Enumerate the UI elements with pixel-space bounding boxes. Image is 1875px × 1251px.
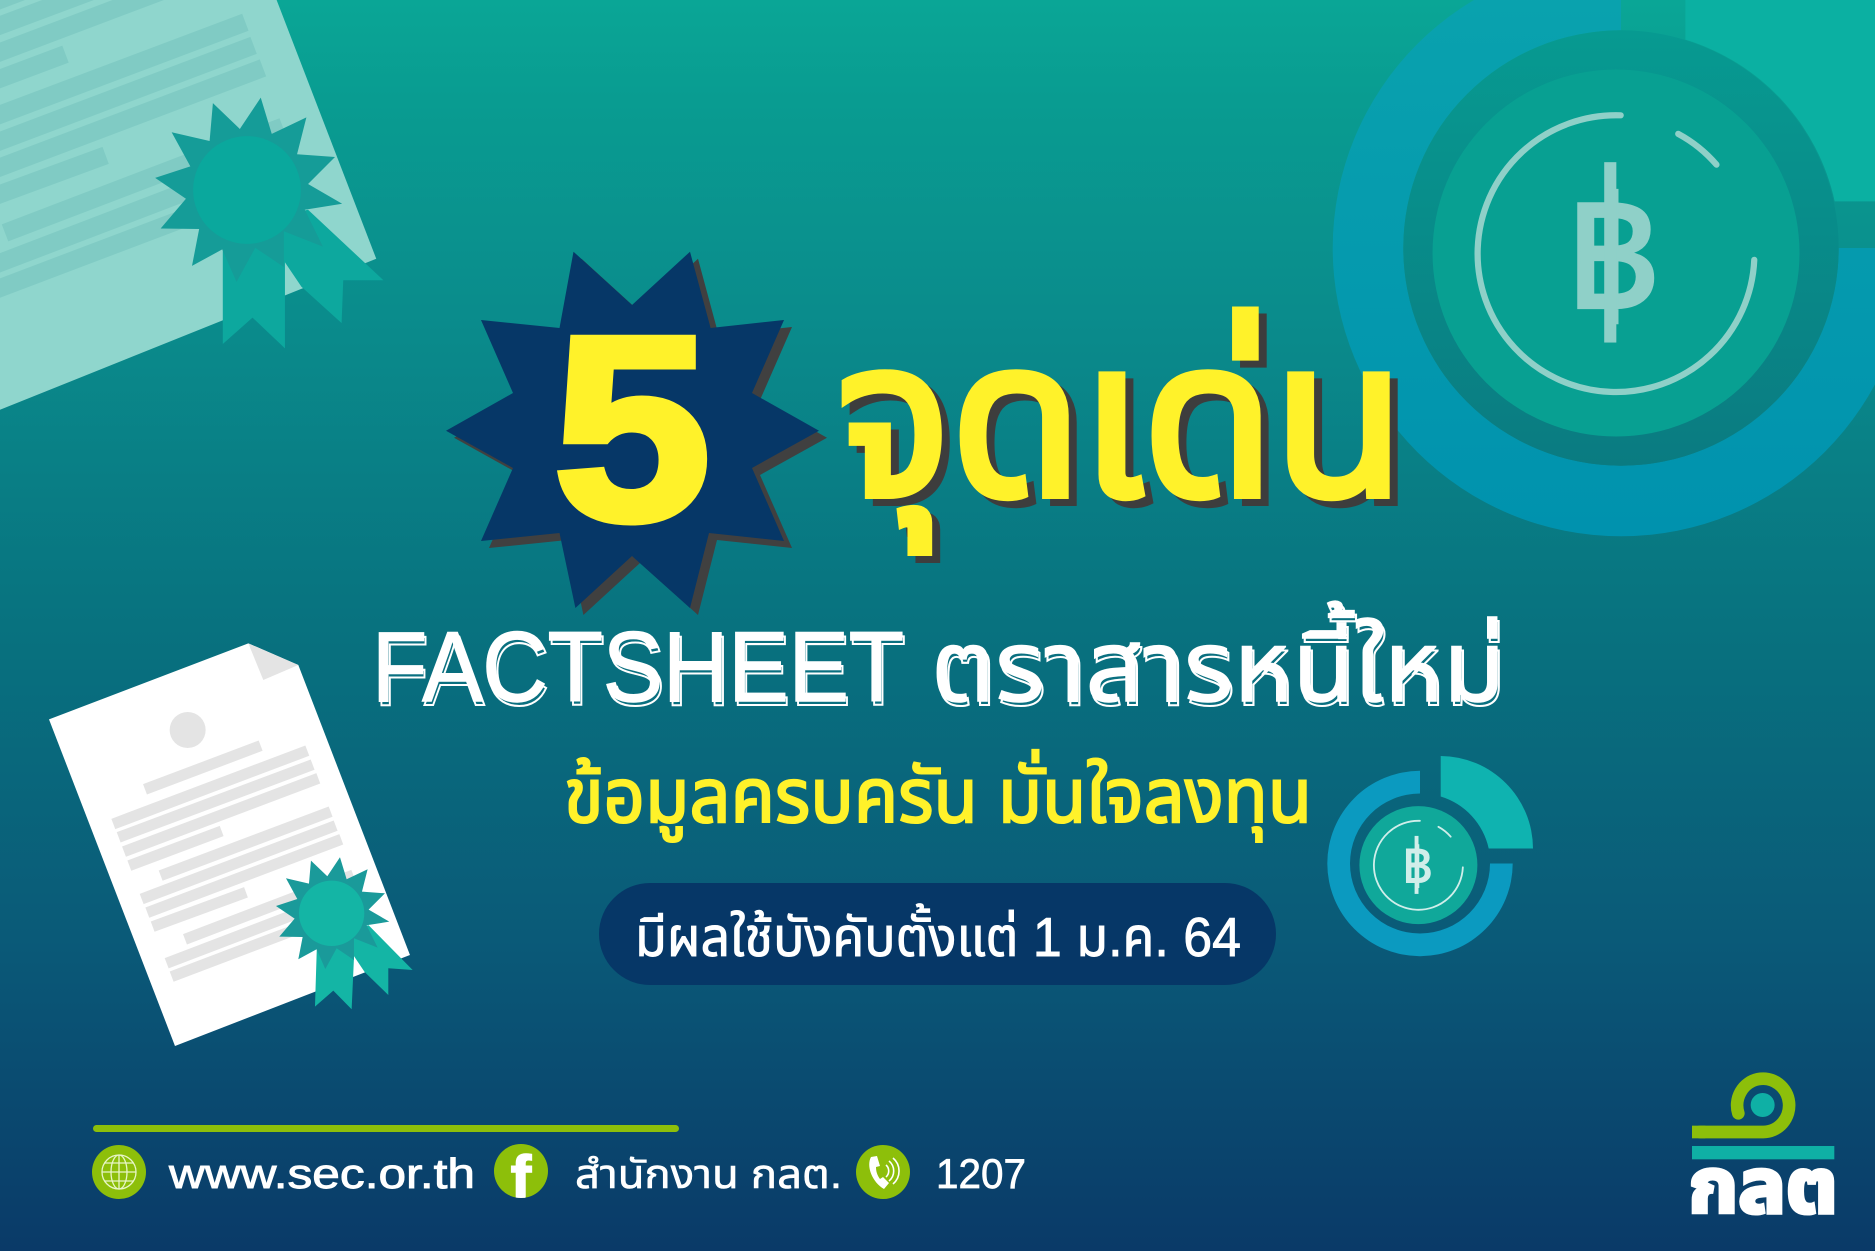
- icon: facebook: f: [511, 1144, 532, 1213]
- icon: faded certificate top left: [0, 0, 383, 414]
- callout: effective date pill: มีผลใช้บังคับตั้งแต่ 1 ม.ค. 64: [635, 903, 1241, 969]
- heading: FACTSHEET ตราสารหนี้ใหม่: FACTSHEET: [372, 611, 904, 722]
- icon: phone: [856, 1145, 910, 1199]
- text: office name: สำนักงาน กลต.: [575, 1153, 842, 1197]
- logo: SEC Thailand: [1689, 1079, 1838, 1229]
- title: จุดเด่น: จุดเด่น: [838, 299, 1404, 552]
- heading: FACTSHEET ตราสารหนี้ใหม่: ตราสารหนี้ใหม่: [931, 601, 1505, 722]
- icon: faded baht coin chart top right: [1333, 0, 1875, 536]
- text: website: www.sec.or.th: [168, 1150, 475, 1197]
- footer rule: [93, 1125, 679, 1132]
- heading: FACTSHEET ตราสารหนี้ใหม่: [372, 601, 1507, 726]
- heading: FACTSHEET ตราสารหนี้ใหม่: ตราสารหนี้ใหม่: [933, 605, 1507, 726]
- icon: faded baht coin chart top right: ฿: [1566, 168, 1660, 348]
- icon: baht coin chart: ฿: [1402, 838, 1433, 896]
- icon: baht coin chart: [1327, 756, 1533, 956]
- icon: facebook: [494, 1144, 548, 1198]
- icon: navy star badge: [446, 252, 827, 615]
- logo: SEC Thailand: กลต: [1689, 1144, 1838, 1229]
- title: จุดเด่น: จุดเด่น: [846, 306, 1412, 559]
- subheading: ข้อมูลครบครัน มั่นใจลงทุน: ข้อมูลครบครัน มั่นใจลงทุน: [564, 749, 1312, 842]
- text: hotline: 1207: [936, 1150, 1026, 1197]
- number 5: 5: [553, 282, 711, 575]
- icon: certificate with seal: [49, 643, 413, 1046]
- callout: effective date pill: [599, 883, 1276, 985]
- heading: FACTSHEET ตราสารหนี้ใหม่: FACTSHEET: [374, 615, 906, 726]
- icon: globe: [92, 1145, 146, 1199]
